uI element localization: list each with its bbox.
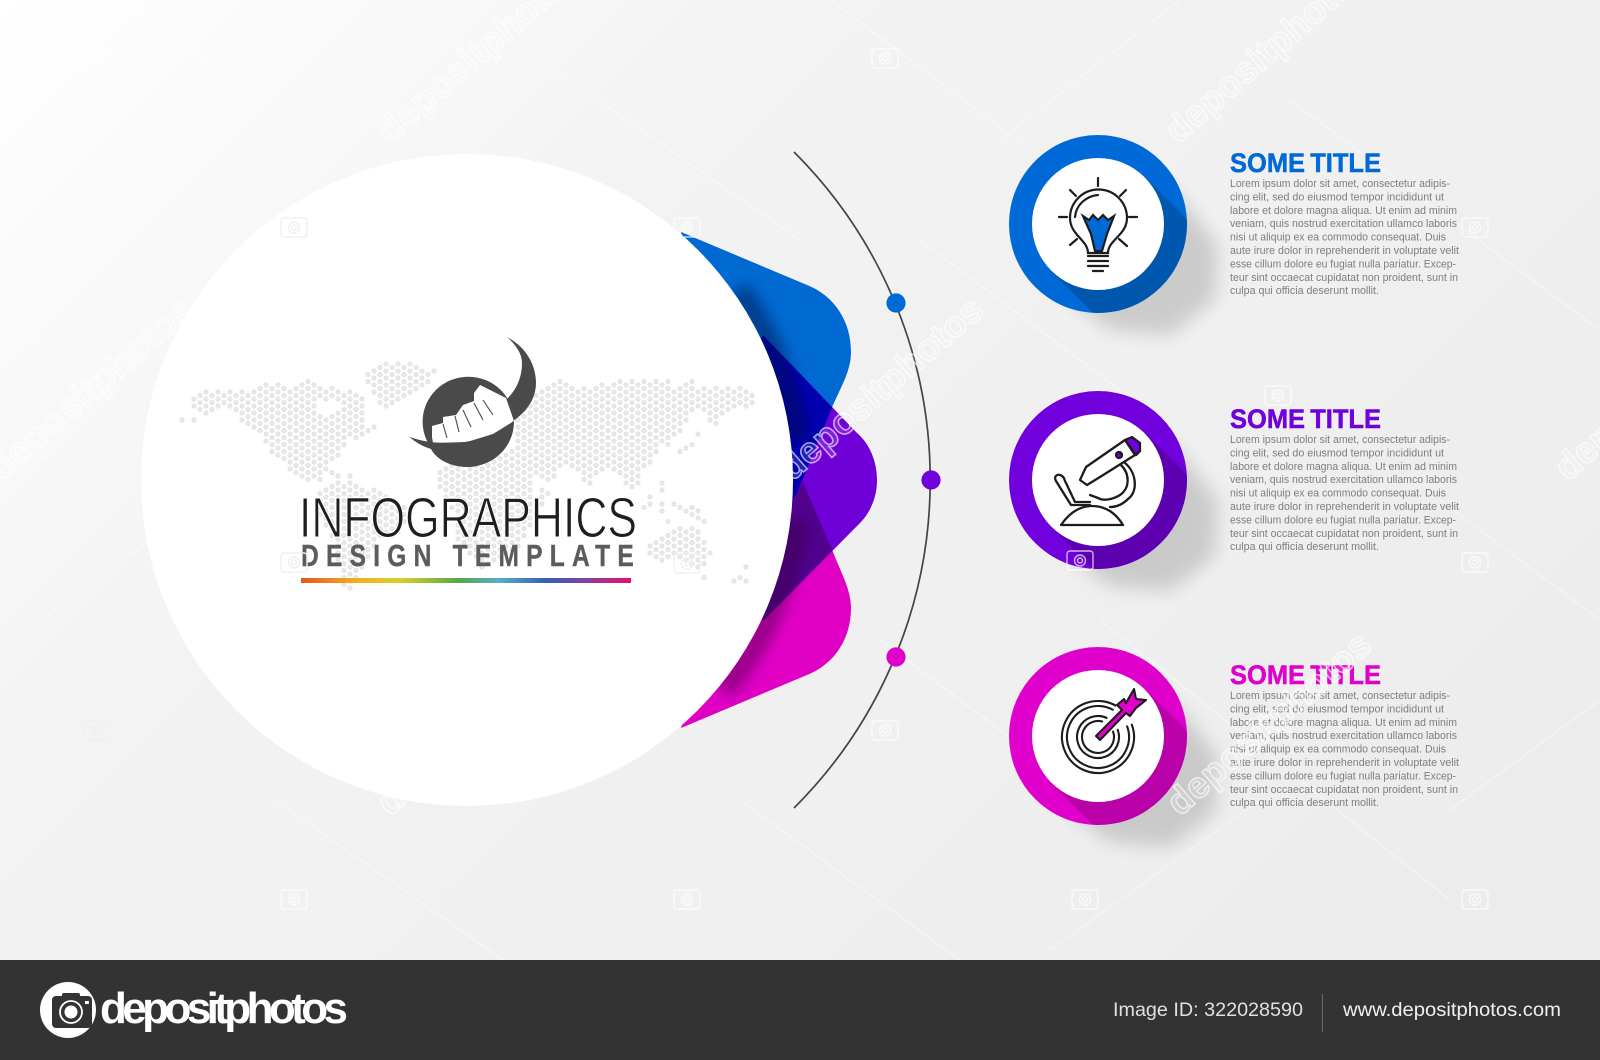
- body copy: [1230, 434, 1459, 553]
- icon: lightbulb: [1059, 178, 1137, 271]
- long soft shadow: [1070, 185, 1218, 335]
- body copy: Lorem ipsum dolor sit amet, consectetur adipis-: [1230, 690, 1450, 702]
- wedge: purple: [700, 335, 877, 621]
- text block 3: [1230, 660, 1459, 809]
- rising bars: [432, 385, 514, 443]
- footer logo: camera: [40, 982, 96, 1038]
- heading: SOME TITLE: [1230, 660, 1381, 690]
- body copy: [1230, 690, 1459, 809]
- purple ring: [1009, 391, 1187, 569]
- body copy: veniam, quis nostrud exercitation ullamco laboris: [1230, 218, 1457, 230]
- body copy: cing elit, sed do eiusmod tempor incididunt ut: [1230, 191, 1444, 203]
- body copy: teur sint occaecat cupidatat non proident, sunt in: [1230, 528, 1458, 540]
- body copy: cing elit, sed do eiusmod tempor incididunt ut: [1230, 703, 1444, 715]
- body copy: veniam, quis nostrud exercitation ullamco laboris: [1230, 730, 1457, 742]
- body copy: nisi ut aliquip ex ea commodo consequat. Duis: [1230, 488, 1446, 500]
- body copy: labore et dolore magna aliqua. Ut enim ad minim: [1230, 205, 1457, 217]
- bar separators: [443, 400, 493, 438]
- crescent: [507, 337, 536, 421]
- body copy: esse cillum dolore eu fugiat nulla pariatur. Excep-: [1230, 514, 1456, 526]
- title: infographics: INFOGRAPHICS: [299, 486, 637, 550]
- footer logo: wordmark: depositphotos: [100, 984, 348, 1033]
- ring long shadow: [1051, 433, 1187, 569]
- body copy: nisi ut aliquip ex ea commodo consequat. Duis: [1230, 744, 1446, 756]
- item 2: microscope badge: [1009, 391, 1224, 596]
- subtitle: design template: DESIGN TEMPLATE: [301, 538, 634, 573]
- white inner disc: [1032, 414, 1164, 546]
- text block 2: [1230, 404, 1459, 553]
- blue ring: [1009, 135, 1187, 313]
- body copy: culpa qui officia deserunt mollit.: [1230, 285, 1379, 297]
- diagonal depositphotos watermarks: depositphotos: [770, 288, 991, 488]
- heading: SOME TITLE: [1230, 148, 1381, 178]
- body copy: Lorem ipsum dolor sit amet, consectetur adipis-: [1230, 178, 1450, 190]
- watermark camera icons: [84, 49, 1488, 909]
- swoosh: [409, 421, 514, 467]
- diagonal depositphotos watermarks: depositphotos: [1158, 623, 1379, 823]
- wedge: magenta: [681, 482, 851, 728]
- body copy: aute irure dolor in reprehenderit in voluptate velit: [1230, 245, 1459, 257]
- footer divider: [1322, 994, 1323, 1032]
- body copy: veniam, quis nostrud exercitation ullamco laboris: [1230, 474, 1457, 486]
- body copy: culpa qui officia deserunt mollit.: [1230, 541, 1379, 553]
- item 3: target badge: [1009, 647, 1224, 852]
- ring long shadow: [1051, 177, 1187, 313]
- body copy: Lorem ipsum dolor sit amet, consectetur adipis-: [1230, 434, 1450, 446]
- dot: purple: [921, 470, 941, 490]
- rainbow underline: [301, 578, 631, 583]
- arc connector line: [794, 152, 930, 808]
- body copy: teur sint occaecat cupidatat non proident, sunt in: [1230, 784, 1458, 796]
- dotted world map: [182, 364, 752, 588]
- body copy: [1230, 178, 1459, 297]
- sphere: [423, 377, 514, 467]
- long soft shadow: [1070, 697, 1218, 847]
- main white circle: [141, 154, 793, 806]
- icon: microscope: [1055, 437, 1140, 525]
- body copy: aute irure dolor in reprehenderit in voluptate velit: [1230, 501, 1459, 513]
- dot: magenta: [886, 647, 906, 667]
- layered wedges behind the main circle: [681, 232, 877, 728]
- dot: blue: [886, 293, 906, 313]
- white inner disc: [1032, 158, 1164, 290]
- body copy: labore et dolore magna aliqua. Ut enim ad minim: [1230, 717, 1457, 729]
- ring long shadow: [1051, 689, 1187, 825]
- item 1: lightbulb badge: [1009, 135, 1224, 340]
- body copy: culpa qui officia deserunt mollit.: [1230, 797, 1379, 809]
- body copy: teur sint occaecat cupidatat non proident, sunt in: [1230, 272, 1458, 284]
- magenta ring: [1009, 647, 1187, 825]
- text block 1: [1230, 148, 1459, 297]
- long soft shadow: [1070, 441, 1218, 591]
- website url: www.depositphotos.com: [1342, 999, 1561, 1021]
- wedge shadow: magenta side: [724, 520, 797, 690]
- wedge shadow: blue side: [739, 290, 797, 440]
- overlap: blue and purple: [761, 336, 832, 501]
- white inner disc: [1032, 670, 1164, 802]
- icon: target with arrow: [1052, 689, 1146, 783]
- body copy: esse cillum dolore eu fugiat nulla pariatur. Excep-: [1230, 770, 1456, 782]
- logo: sphere and crescent: [409, 337, 536, 467]
- footer bar: [0, 960, 1600, 1060]
- heading: SOME TITLE: [1230, 404, 1381, 434]
- body copy: cing elit, sed do eiusmod tempor incididunt ut: [1230, 447, 1444, 459]
- diagonal depositphotos watermarks: depositphotos: [368, 623, 589, 823]
- image id: Image ID: 322028590: [1113, 999, 1303, 1021]
- body copy: nisi ut aliquip ex ea commodo consequat. Duis: [1230, 232, 1446, 244]
- body copy: esse cillum dolore eu fugiat nulla pariatur. Excep-: [1230, 258, 1456, 270]
- body copy: aute irure dolor in reprehenderit in voluptate velit: [1230, 757, 1459, 769]
- wedge: blue: [681, 232, 851, 510]
- overlap: purple and magenta: [762, 482, 832, 621]
- body copy: labore et dolore magna aliqua. Ut enim ad minim: [1230, 461, 1457, 473]
- diagonal depositphotos watermarks: [0, 0, 1600, 823]
